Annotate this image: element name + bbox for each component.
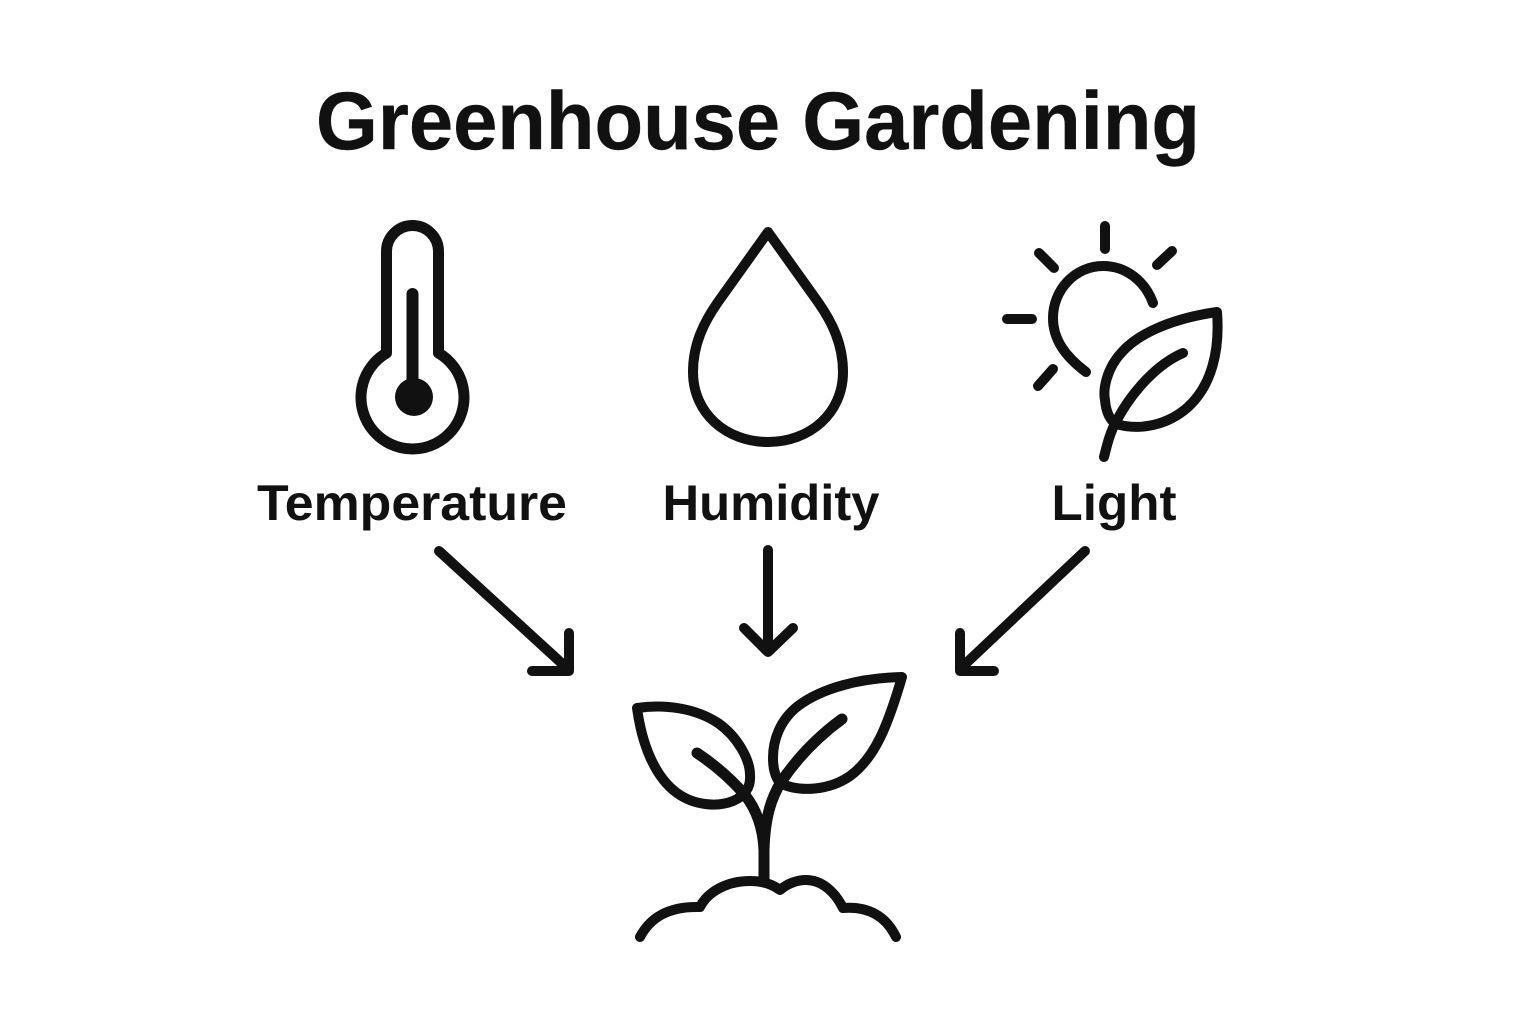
- icon: seedling: [637, 677, 902, 937]
- label: humidity: Humidity: [662, 475, 880, 531]
- icon: thermometer: [361, 226, 464, 449]
- leaf vein and stem: [1104, 353, 1183, 457]
- icon: sun and leaf: [1007, 226, 1218, 457]
- right leaf: [773, 677, 902, 789]
- label: light: Light: [1052, 475, 1177, 531]
- sun rays: [1007, 226, 1172, 386]
- arrow: light to plant: [960, 551, 1085, 671]
- leaf: [1104, 312, 1218, 427]
- left vein and stem: [697, 753, 764, 880]
- sun arc: [1053, 266, 1153, 372]
- label: temperature: Temperature: [257, 475, 567, 531]
- arrow: temperature to plant: [439, 551, 569, 671]
- title: Greenhouse Gardening: [316, 76, 1200, 167]
- soil mound: [640, 880, 896, 937]
- icon: water drop: [693, 232, 843, 442]
- arrow: humidity to plant: [744, 550, 793, 652]
- left leaf: [637, 707, 750, 805]
- right vein and stem: [764, 719, 842, 880]
